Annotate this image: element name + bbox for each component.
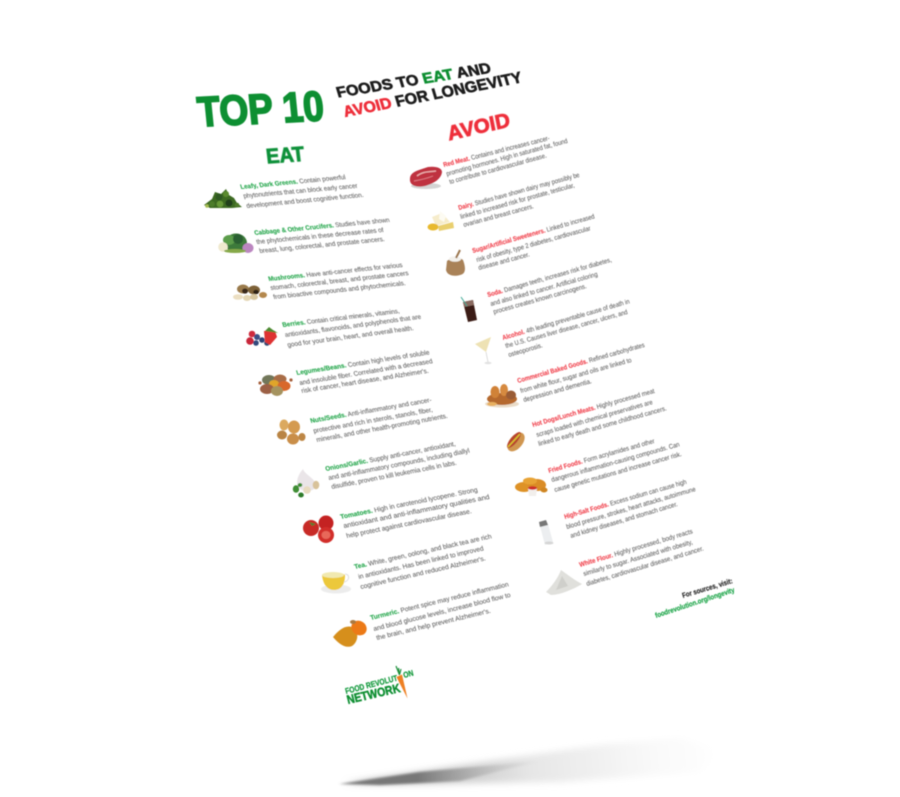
panel: avoid list [443,135,705,588]
item: high salt foods: and kidney diseases, and stomach cancer. [570,501,679,540]
item: nuts and seeds: minerals, and other health-promoting nutrients. [316,413,449,444]
item: onions and garlic: Onions/Garlic. Supply anti-cancer, antioxidant, [325,441,457,473]
panel: eat list [240,174,512,642]
item: tomatoes: antioxidant and anti-inflammatory qualities and [343,494,491,530]
item: fried foods: cause genetic mutations and increase cancer risk. [554,451,683,494]
item: hot dogs: Hot Dogs/Lunch Meats. Highly processed meat [532,388,656,429]
item: soda: and also linked to cancer. Artificial coloring [490,271,599,308]
icon: tomatoes [303,516,334,543]
item: nuts and seeds: Nuts/Seeds. Anti-inflammatory and cancer- [310,397,433,425]
item: soda: process creates known carcinogens. [493,283,588,316]
item: alcohol: Alcohol. 4th leading preventable cause of death in [502,298,631,342]
item: cabbage: Cabbage & Other Crucifers. Studies have shown [254,217,391,237]
item: white flour: White Flour. Highly processed, body reacts [579,528,694,569]
item: fried foods: Fried Foods. Form acrylamides and other [548,438,656,475]
item: high salt foods: blood pressure, strokes, heart attacks, autoimmune [566,486,697,531]
icon: garlic [293,469,319,498]
item: leafy greens: phytonutrients that can block early cancer [243,183,359,200]
item: red meat: to contribute to cardiovascular disease. [449,152,548,186]
item: tea: Tea. White, green, oolong, and black tea are rich [354,533,493,571]
item: baked goods: depression and dementia. [523,378,593,404]
item: nuts and seeds: protective and rich in sterols, stanols, fiber, [313,407,434,435]
item: turmeric [370,581,512,642]
logo [344,666,415,707]
item: soda: Soda. Damages teeth, increases risk for diabetes, [487,257,613,299]
icon: berries [246,327,278,346]
item: mushrooms: from bioactive compounds and phytochemicals. [273,280,407,301]
icon: baked goods [485,384,519,408]
item: leafy greens: development and boost cognitive function. [246,192,365,210]
item: leafy greens [240,174,365,210]
sources note: foodrevolution.org/longevity [654,585,736,620]
item: leafy greens: Leafy, Dark Greens. Contain powerful [240,174,347,191]
icon: nuts [277,420,306,444]
logo: NETWORK [345,681,402,707]
item: white flour: similarly to sugar. Associated with obesity, [583,539,694,578]
item: legumes [296,349,434,395]
icon: martini [475,337,492,364]
item: tea [354,533,493,591]
item: baked goods: from white flour, sugar and oils are linked to [520,357,633,395]
icon: mushrooms [233,284,267,301]
item: legumes: Legumes/Beans. Contain high levels of soluble [296,349,431,377]
item: cabbage: breast, lung, colorectal, and prostate cancers. [259,236,386,255]
item: dairy [458,172,581,229]
icon: soda [461,297,477,322]
item: tomatoes: Tomatoes. High in carotenoid lycopene. Strong [340,487,479,521]
item: onions and garlic: and anti-inflammatory compounds, including diallyl [328,448,471,482]
item: turmeric: and blood glucose levels, increase blood flow to [373,592,512,633]
item: baked goods [517,342,646,404]
item: mushrooms: Mushrooms. Have anti-cancer effects for various [268,262,404,283]
item: white flour [579,528,705,588]
title: line one: FOODS TO EAT AND [335,61,493,101]
item: alcohol: the U.S. Causes liver disease, cancer, ulcers, and [505,309,629,350]
sources note: For sources, visit: [681,576,734,600]
item: fried foods: dangerous inflammation-causing compounds. Can [551,441,681,484]
icon: sugar sack [446,250,465,276]
item: sugar: risk of obesity, type 2 diabetes, cardiovascular [476,225,592,264]
heading: avoid: AVOID [445,109,512,145]
icon: red meat [410,167,442,189]
item: mushrooms [268,262,410,301]
item: sugar: disease and cancer. [478,251,531,272]
item: tomatoes [340,487,491,540]
title [195,61,525,135]
item: tea: in antioxidants. Has been linked to improved [358,545,485,581]
item: dairy: Dairy. Studies have shown dairy may possibly be [458,172,581,212]
item: tea: cognitive function and reduced Alzheimer's. [360,555,487,591]
item: cabbage [254,217,391,255]
icon: fried foods [515,478,548,496]
heading: eat: EAT [265,143,306,168]
icon: salt shaker [539,520,554,545]
item: legumes: and insoluble fiber. Correlated with a decreased [299,358,434,387]
item: alcohol: osteoporosis. [508,342,544,359]
sheet shadow [339,738,725,785]
item: onions and garlic [325,441,471,491]
item: red meat: Red Meat. Contains and increases cancer- [443,135,551,169]
item: cabbage: the phytochemicals in these decrease rates of [256,227,385,246]
icon: legumes [258,374,293,396]
item: berries: good for your brain, heart, and overall health. [287,325,415,349]
item: berries [282,308,422,349]
icon: carrot [396,666,408,698]
item: sugar [472,213,596,272]
item: hot dogs: linked to early death and some childhood cancers. [538,405,668,448]
icon: dairy [428,211,454,231]
item: red meat: promoting hormones. High in saturated fat, found [446,138,569,178]
item: high salt foods: High-Salt Foods. Excess sodium can cause high [564,479,688,521]
item: dairy: linked to increased risk for prostate, testicular, [460,182,576,221]
item: tomatoes: help protect against cardiovascular disease. [346,508,473,540]
title: top 10: TOP 10 [195,82,326,135]
item: soda [487,257,613,316]
item: onions and garlic: disulfide, proven to kill leukemia cells in labs. [331,460,458,491]
item: hot dogs: scraps loaded with chemical preservatives are [536,399,654,439]
item: dairy: ovarian and breast cancers. [463,203,535,229]
item: sugar: Sugar/Artificial Sweeteners. Linked to increased [472,213,596,255]
item: alcohol [502,298,631,359]
logo: ON [402,669,415,680]
icon: turmeric [333,618,370,647]
item: white flour: diabetes, cardiovascular disease, and cancer. [586,545,705,588]
icon: cabbage [218,234,254,253]
item: legumes: risk of cancer, heart disease, and Alzheimer's. [301,368,430,395]
title: line two: AVOID FOR LONGEVITY [341,69,525,121]
item: turmeric: the brain, and help prevent Alzheimer's. [376,608,492,642]
item: mushrooms: stomach, colorectral, breast, and prostate cancers [270,270,410,292]
panel: food icons [204,167,582,647]
item: turmeric: Turmeric. Potent spice may reduce inflammation [370,581,510,622]
icon: tea [321,572,351,594]
icon: white flour [546,570,582,595]
icon: leafy greens [204,189,242,208]
item: nuts and seeds [310,397,449,444]
item: berries: Berries. Contain critical minerals, vitamins, [282,308,401,329]
item: berries: antioxidants, flavonoids, and polyphenols that are [284,314,422,339]
icon: hot dog [504,429,528,455]
item: baked goods: Commercial Baked Goods. Refined carbohydrates [517,342,646,385]
logo: FOOD REVOLUT [344,674,398,696]
